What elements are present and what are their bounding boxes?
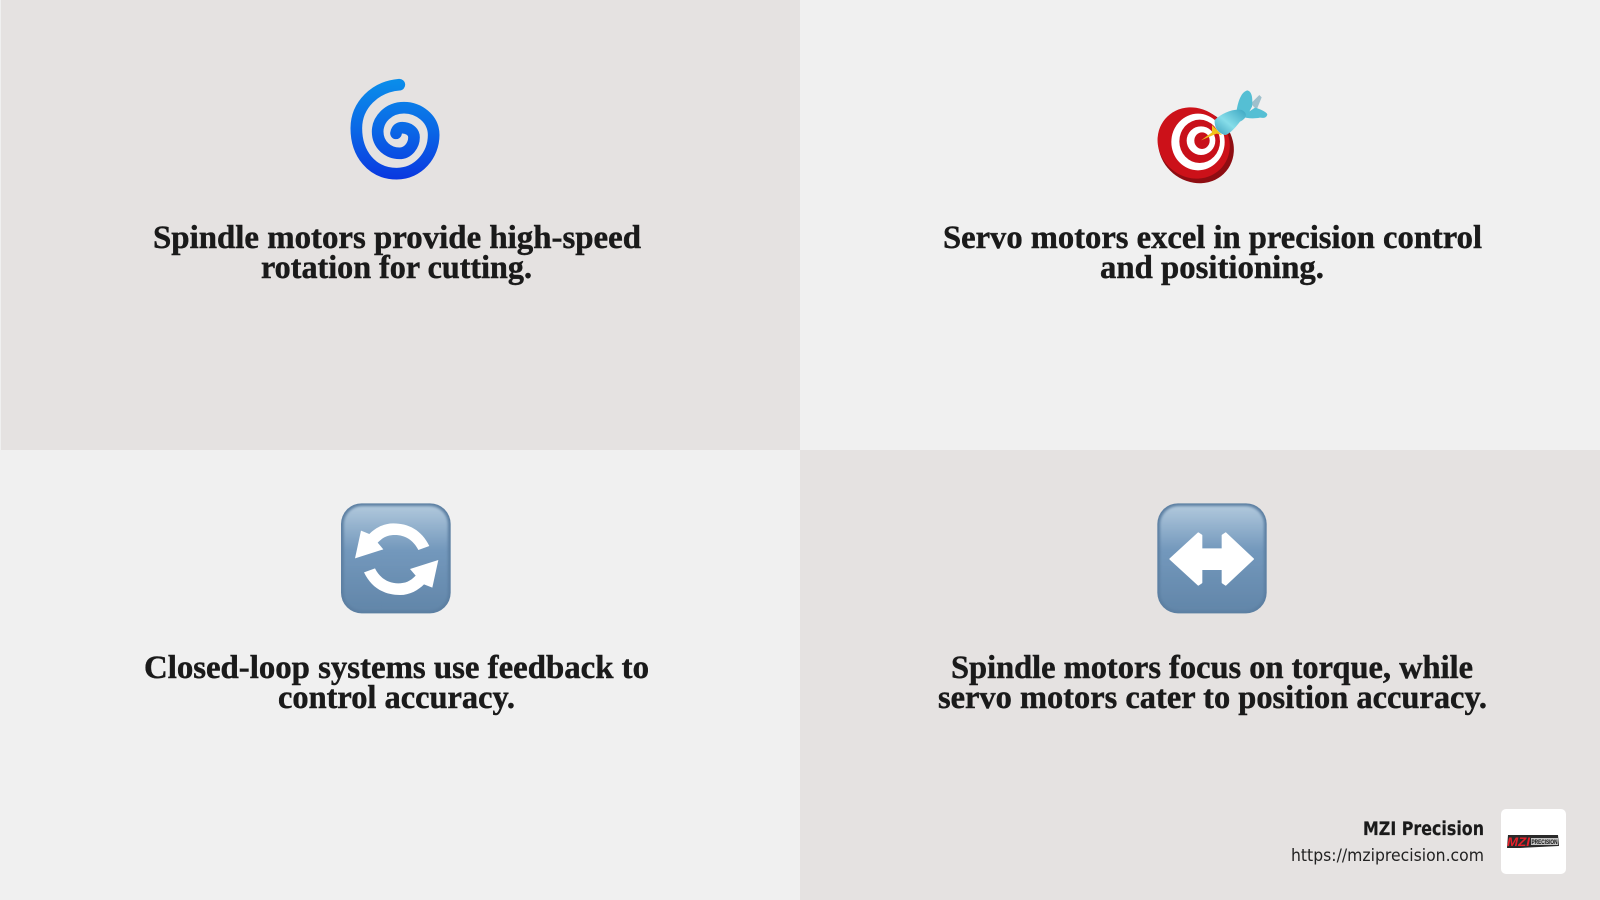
logo card bbox=[1501, 809, 1566, 874]
panel: spindle motors bbox=[1, 0, 800, 450]
panel: torque versus position bbox=[800, 450, 1600, 900]
heading: spindle motors: Spindle motors provide high-speed bbox=[153, 220, 641, 256]
icon: blue spiral bbox=[350, 78, 440, 180]
icon: left-right arrow bbox=[1157, 503, 1267, 614]
brand footer bbox=[1291, 809, 1566, 874]
heading: servo motors: Servo motors excel in precision control bbox=[943, 220, 1482, 256]
heading: closed-loop systems: Closed-loop systems use feedback to bbox=[144, 650, 649, 686]
heading: closed-loop systems: control accuracy. bbox=[278, 680, 515, 716]
brand url: https://mziprecision.com bbox=[1291, 846, 1484, 865]
logo card: MZI bbox=[1507, 835, 1531, 849]
heading: torque versus position: servo motors cater to position accuracy. bbox=[938, 680, 1487, 716]
heading: torque versus position: Spindle motors focus on torque, while bbox=[951, 650, 1473, 686]
panel: closed-loop systems bbox=[0, 450, 800, 900]
icon: dart and target bbox=[1158, 90, 1268, 184]
heading: servo motors: and positioning. bbox=[1100, 250, 1324, 286]
icon: cycle arrows bbox=[341, 503, 451, 614]
panel: servo motors bbox=[800, 0, 1600, 450]
heading: spindle motors: rotation for cutting. bbox=[261, 250, 532, 286]
logo card: PRECISION bbox=[1532, 840, 1558, 846]
brand name: MZI Precision bbox=[1363, 819, 1484, 840]
